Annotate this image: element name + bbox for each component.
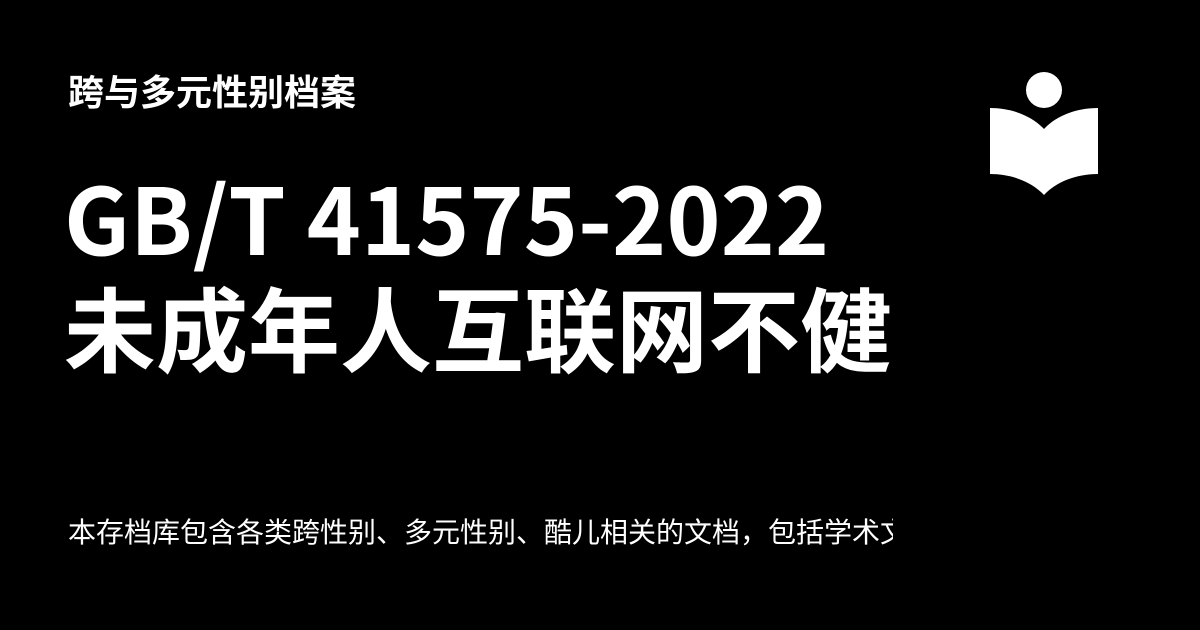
- main title: [64, 161, 892, 383]
- site name heading: 跨与多元性别档案: [68, 64, 356, 116]
